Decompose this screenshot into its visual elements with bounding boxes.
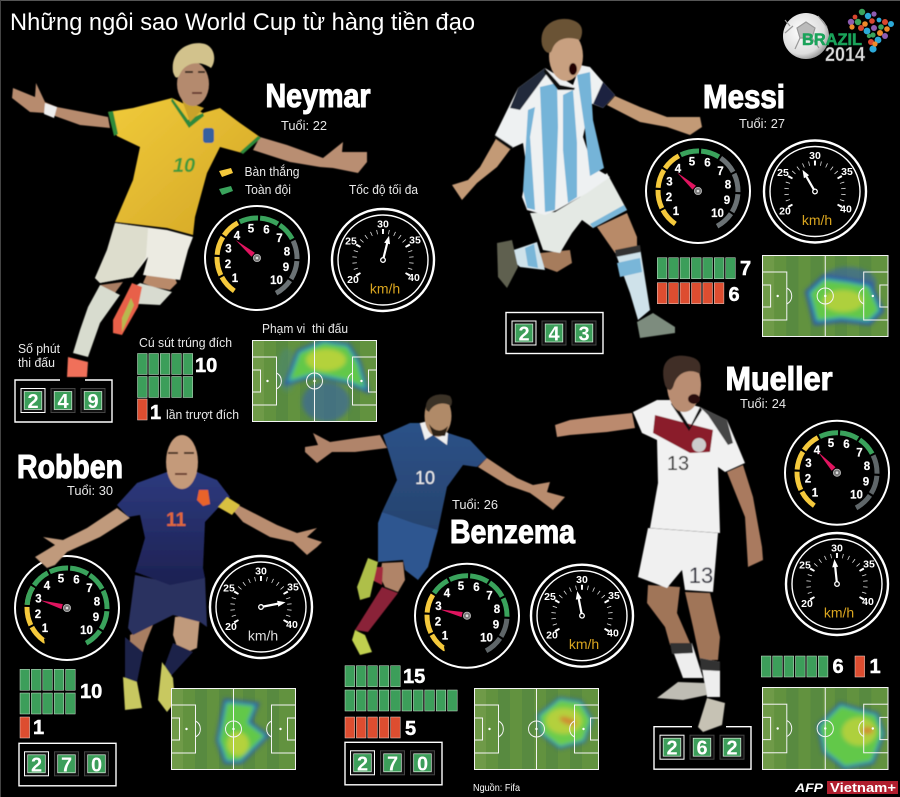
score gauge: 3 bbox=[225, 244, 232, 256]
icon: map of coloured dots bbox=[848, 9, 894, 53]
shots bars: 10 bbox=[195, 355, 217, 377]
speed gauge: 35 bbox=[409, 234, 421, 246]
minutes box bbox=[506, 312, 603, 354]
speed gauge: 35 bbox=[863, 558, 875, 570]
heat map bbox=[474, 688, 599, 770]
heat map bbox=[252, 340, 377, 422]
player figure: Neymar: 10 bbox=[173, 155, 195, 177]
score gauge: 7 bbox=[486, 591, 493, 603]
label: top speed: Tốc độ tối đa bbox=[349, 183, 418, 197]
minutes box bbox=[15, 380, 112, 422]
logo text: BRAZIL bbox=[802, 31, 862, 49]
score gauge: 4 bbox=[444, 588, 451, 600]
panel: Neymar bbox=[12, 43, 434, 424]
shots bars: 1 bbox=[150, 402, 161, 424]
score gauge: 2 bbox=[666, 192, 672, 204]
shots bars: 15 bbox=[403, 666, 425, 688]
shots bars: 6 bbox=[728, 284, 740, 306]
score gauge: 1 bbox=[673, 206, 680, 218]
score gauge: 6 bbox=[843, 439, 850, 451]
shots bars bbox=[138, 354, 239, 424]
shots bars: 10 bbox=[80, 681, 102, 703]
minutes box: 7 bbox=[387, 753, 398, 775]
shots bars: 1 bbox=[33, 717, 44, 739]
minutes box: 4 bbox=[548, 324, 560, 346]
minutes box: 7 bbox=[61, 754, 72, 776]
minutes box: 2 bbox=[726, 738, 738, 760]
score gauge: 10 bbox=[850, 490, 863, 502]
name: Robben: Robben bbox=[17, 448, 123, 485]
minutes box: 2 bbox=[27, 391, 39, 413]
speed gauge: 20 bbox=[347, 274, 359, 286]
shots bars bbox=[761, 656, 881, 678]
speed gauge bbox=[786, 533, 888, 635]
speed gauge: 40 bbox=[862, 596, 874, 608]
score gauge bbox=[411, 560, 523, 671]
logo: Brazil 2014 bbox=[783, 9, 894, 66]
minutes box: 9 bbox=[87, 391, 99, 413]
speed gauge: 30 bbox=[255, 566, 267, 578]
speed gauge: 20 bbox=[779, 206, 791, 218]
age: Tuổi: 26 bbox=[452, 498, 498, 512]
icon: football bbox=[783, 13, 829, 59]
score gauge: 4 bbox=[675, 164, 682, 176]
panel: Benzema bbox=[305, 394, 633, 785]
logo year: 2014 bbox=[825, 44, 866, 66]
speed gauge: 30 bbox=[377, 218, 389, 230]
score gauge: 1 bbox=[442, 631, 449, 643]
minutes box: 2 bbox=[666, 738, 678, 760]
score gauge bbox=[201, 202, 313, 314]
score gauge bbox=[781, 417, 893, 528]
speed gauge: 25 bbox=[777, 167, 789, 179]
panel: Robben bbox=[11, 435, 322, 786]
minutes box: 2 bbox=[357, 753, 368, 775]
score gauge: 6 bbox=[263, 224, 270, 236]
label: minutes played: Số phút bbox=[18, 342, 61, 356]
score gauge: 5 bbox=[248, 224, 255, 236]
label: minutes played bbox=[18, 342, 61, 370]
score gauge: 1 bbox=[232, 273, 239, 285]
score gauge: 5 bbox=[58, 574, 65, 586]
score gauge: 5 bbox=[689, 156, 696, 168]
shots bars: lần trượt đích bbox=[166, 408, 239, 422]
credit: Vietnam+: Vietnam+ bbox=[830, 781, 896, 795]
score gauge: 7 bbox=[86, 583, 93, 595]
speed gauge: 25 bbox=[544, 591, 556, 603]
score gauge: 2 bbox=[435, 617, 441, 629]
label: minutes played: thi đấu bbox=[18, 356, 55, 370]
score gauge: 9 bbox=[283, 262, 289, 274]
speed gauge bbox=[531, 565, 633, 667]
speed gauge: 30 bbox=[576, 574, 588, 586]
title: Những ngôi sao World Cup từ hàng tiền đạo bbox=[10, 9, 475, 36]
speed gauge: 20 bbox=[546, 630, 558, 642]
speed gauge: 40 bbox=[840, 204, 852, 216]
player figure: Mueller: 13 bbox=[667, 453, 689, 475]
score gauge: 6 bbox=[473, 582, 480, 594]
name: Mueller: Mueller bbox=[726, 360, 833, 397]
shots bars: 1 bbox=[869, 656, 881, 678]
minutes box: 2 bbox=[518, 324, 530, 346]
arm: Robben left arm overlapping the gauge bbox=[35, 508, 130, 568]
speed gauge: km/h bbox=[824, 604, 854, 620]
heat map bbox=[762, 255, 888, 337]
score gauge: 8 bbox=[94, 596, 101, 608]
age: Tuổi: 30 bbox=[67, 484, 113, 498]
score gauge: 9 bbox=[724, 195, 730, 207]
speed gauge: 40 bbox=[607, 628, 619, 640]
legend bbox=[219, 164, 300, 197]
score gauge: 10 bbox=[270, 275, 283, 287]
name: Benzema: Benzema bbox=[450, 513, 576, 550]
speed gauge: 35 bbox=[841, 166, 853, 178]
heat map bbox=[762, 687, 888, 770]
score gauge: 8 bbox=[494, 604, 501, 616]
shots bars bbox=[657, 258, 751, 306]
legend: Bàn thắng bbox=[244, 164, 300, 179]
score gauge: 10 bbox=[80, 625, 93, 637]
label: shots on target: Cú sút trúng đích bbox=[139, 336, 232, 350]
score gauge: 5 bbox=[828, 438, 835, 450]
speed gauge: 40 bbox=[408, 272, 420, 284]
speed gauge bbox=[764, 140, 866, 242]
speed gauge: km/h bbox=[370, 280, 400, 296]
panel: Mueller bbox=[555, 356, 893, 770]
score gauge: 2 bbox=[805, 474, 811, 486]
score gauge: 2 bbox=[35, 609, 41, 621]
score gauge: 3 bbox=[435, 601, 442, 613]
score gauge: 7 bbox=[717, 166, 724, 178]
player figure: Mueller bbox=[555, 356, 763, 732]
speed gauge: 20 bbox=[225, 621, 237, 633]
source note: Nguồn: Fifa bbox=[473, 782, 520, 794]
minutes box: 0 bbox=[91, 754, 102, 776]
player figure: Robben: 11 bbox=[166, 510, 186, 531]
speed gauge: 30 bbox=[831, 542, 843, 554]
player figure: Robben bbox=[117, 435, 322, 712]
speed gauge: 35 bbox=[608, 590, 620, 602]
shots bars: 5 bbox=[405, 718, 416, 740]
score gauge: 10 bbox=[711, 208, 724, 220]
score gauge: 7 bbox=[276, 233, 283, 245]
score gauge: 4 bbox=[234, 230, 241, 242]
minutes box bbox=[19, 743, 116, 786]
minutes box: 3 bbox=[578, 324, 590, 346]
speed gauge: 40 bbox=[286, 619, 298, 631]
speed gauge: 35 bbox=[287, 582, 299, 594]
player figure: Mueller: 13 bbox=[689, 563, 713, 588]
age: Tuổi: 24 bbox=[740, 397, 786, 411]
credit: AFP: AFP bbox=[794, 781, 824, 795]
score gauge: 4 bbox=[44, 580, 51, 592]
score gauge: 9 bbox=[93, 612, 99, 624]
shots bars: 7 bbox=[740, 258, 751, 280]
score gauge: 7 bbox=[856, 448, 863, 460]
player figure: Benzema bbox=[305, 394, 565, 655]
score gauge: 8 bbox=[725, 180, 732, 192]
shots bars bbox=[345, 666, 457, 740]
legend: Toàn đội bbox=[245, 183, 291, 197]
score gauge: 2 bbox=[225, 259, 231, 271]
player figure: Benzema: 10 bbox=[415, 468, 435, 488]
score gauge: 4 bbox=[814, 445, 821, 457]
score gauge: 6 bbox=[73, 574, 80, 586]
speed gauge bbox=[332, 209, 434, 311]
player figure: Neymar bbox=[12, 43, 367, 377]
name: Messi: Messi bbox=[703, 78, 785, 115]
panel: Messi bbox=[452, 19, 888, 353]
score gauge: 3 bbox=[35, 594, 42, 606]
score gauge: 1 bbox=[42, 623, 49, 635]
shots bars: 6 bbox=[832, 656, 844, 678]
shots bars bbox=[20, 669, 102, 739]
score gauge: 8 bbox=[864, 461, 871, 473]
score gauge: 9 bbox=[863, 477, 869, 489]
speed gauge: km/h bbox=[569, 636, 599, 652]
score gauge: 1 bbox=[812, 488, 819, 500]
age: Tuổi: 27 bbox=[739, 117, 785, 131]
speed gauge bbox=[210, 556, 312, 658]
minutes box: 0 bbox=[417, 753, 428, 775]
speed gauge: 20 bbox=[801, 598, 813, 610]
minutes box: 2 bbox=[31, 754, 42, 776]
minutes box: 6 bbox=[696, 738, 708, 760]
score gauge: 9 bbox=[493, 620, 499, 632]
label: play area: Phạm vi thi đấu bbox=[262, 322, 348, 336]
score gauge: 3 bbox=[666, 176, 673, 188]
score gauge bbox=[642, 135, 754, 247]
speed gauge: 25 bbox=[799, 560, 811, 572]
speed gauge: 25 bbox=[345, 236, 357, 248]
score gauge bbox=[11, 552, 123, 664]
speed gauge: km/h bbox=[248, 628, 278, 644]
score gauge: 6 bbox=[704, 158, 711, 170]
minutes box bbox=[345, 742, 442, 785]
speed gauge: 30 bbox=[809, 150, 821, 162]
score gauge: 5 bbox=[458, 581, 465, 593]
score gauge: 8 bbox=[284, 246, 291, 258]
score gauge: 3 bbox=[805, 458, 812, 470]
minutes box bbox=[654, 727, 751, 769]
speed gauge: 25 bbox=[223, 582, 235, 594]
minutes box: 4 bbox=[57, 391, 69, 413]
heat map bbox=[171, 688, 296, 770]
speed gauge: km/h bbox=[802, 212, 832, 228]
age: Tuổi: 22 bbox=[281, 119, 327, 133]
player figure: Messi bbox=[452, 19, 702, 338]
name: Neymar: Neymar bbox=[266, 77, 371, 114]
score gauge: 10 bbox=[480, 633, 493, 645]
